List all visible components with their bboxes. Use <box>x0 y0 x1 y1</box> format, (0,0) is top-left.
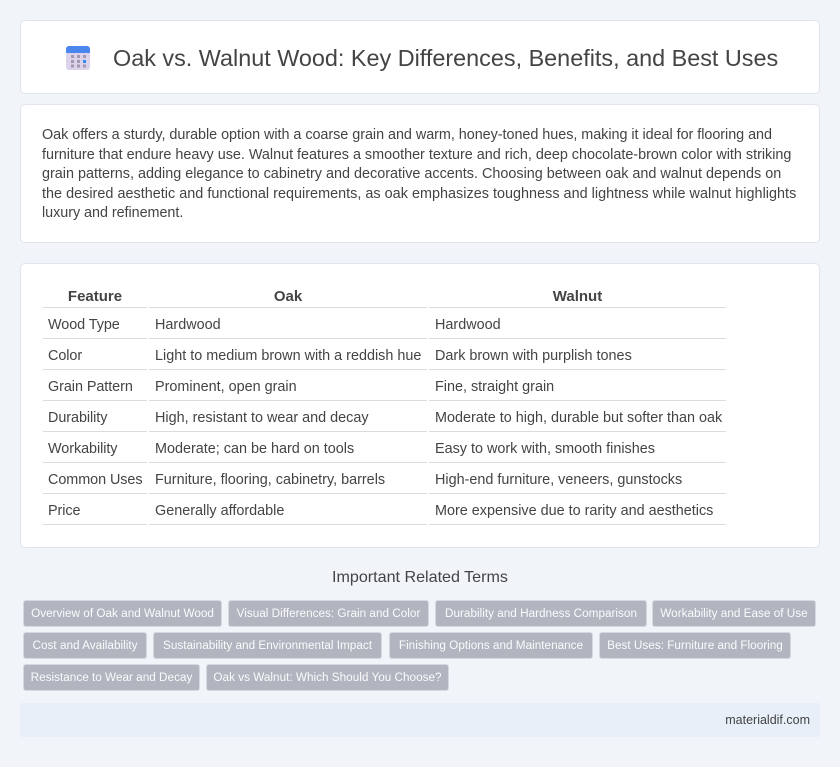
row: common uses <box>48 472 682 488</box>
tag: Resistance to Wear and Decay <box>31 671 192 684</box>
row: durability <box>48 410 722 426</box>
tag <box>23 664 200 691</box>
row: common uses: Common Uses <box>48 472 143 488</box>
row: color: Light to medium brown with a reddish hue <box>155 348 421 364</box>
row: durability: High, resistant to wear and decay <box>155 410 369 426</box>
intro paragraph <box>42 127 796 221</box>
row: price <box>48 503 713 519</box>
intro paragraph: grain patterns, adding elegance to cabinetry and decorative accents. Choosing between oak and walnut depends on <box>42 166 781 182</box>
intro paragraph: furniture that endure heavy use. Walnut features a smoother texture and rich, deep chocolate-brown color with striking <box>42 147 791 163</box>
related terms heading: Important Related Terms <box>332 568 508 586</box>
intro text panel <box>20 104 820 243</box>
row: grain pattern: Prominent, open grain <box>155 379 297 395</box>
tag: Workability and Ease of Use <box>660 607 808 620</box>
row: wood type: Wood Type <box>48 317 120 333</box>
intro paragraph: the desired aesthetic and functional requirements, as oak emphasizes toughness and lightness while walnut highlights <box>42 186 796 202</box>
row: grain pattern: Fine, straight grain <box>435 379 554 395</box>
intro paragraph: Oak offers a sturdy, durable option with a coarse grain and warm, honey-toned hues, making it ideal for flooring and <box>42 127 772 143</box>
icon: calendar <box>66 46 90 70</box>
footer source text: materialdif.com <box>725 713 810 727</box>
tag <box>599 632 791 659</box>
row: price: Generally affordable <box>155 503 284 519</box>
row: color <box>48 348 632 364</box>
title: Oak vs. Walnut Wood: Key Differences, Benefits, and Best Uses <box>113 45 778 71</box>
row: color: Dark brown with purplish tones <box>435 348 632 364</box>
row: color: Color <box>48 348 82 364</box>
tag: Finishing Options and Maintenance <box>399 639 583 652</box>
tag <box>23 600 222 627</box>
row: workability: Moderate; can be hard on tools <box>155 441 354 457</box>
tag: Oak vs Walnut: Which Should You Choose? <box>213 671 442 684</box>
title card <box>20 20 820 94</box>
table header: Oak <box>274 288 302 305</box>
tag: Best Uses: Furniture and Flooring <box>607 639 783 652</box>
tag <box>23 632 147 659</box>
tag <box>435 600 647 627</box>
table header <box>68 288 602 305</box>
row: durability: Durability <box>48 410 107 426</box>
row: workability <box>48 441 655 457</box>
row: workability: Easy to work with, smooth finishes <box>435 441 655 457</box>
tag: Visual Differences: Grain and Color <box>237 607 420 620</box>
row: grain pattern <box>48 379 554 395</box>
table header: Walnut <box>553 288 602 305</box>
row: wood type: Hardwood <box>155 317 221 333</box>
tag <box>206 664 449 691</box>
tag: Overview of Oak and Walnut Wood <box>31 607 214 620</box>
table <box>43 288 726 525</box>
row: durability: Moderate to high, durable but softer than oak <box>435 410 722 426</box>
row: common uses: High-end furniture, veneers, gunstocks <box>435 472 682 488</box>
intro paragraph: luxury and refinement. <box>42 205 183 221</box>
row: grain pattern: Grain Pattern <box>48 379 133 395</box>
row: price: More expensive due to rarity and aesthetics <box>435 503 713 519</box>
row: price: Price <box>48 503 80 519</box>
tag <box>228 600 429 627</box>
row: common uses: Furniture, flooring, cabinetry, barrels <box>155 472 385 488</box>
tag <box>153 632 382 659</box>
row: wood type <box>48 317 501 333</box>
row: wood type: Hardwood <box>435 317 501 333</box>
row: workability: Workability <box>48 441 117 457</box>
tag: Durability and Hardness Comparison <box>445 607 637 620</box>
tag <box>389 632 593 659</box>
tag: Cost and Availability <box>33 639 137 652</box>
tag: Sustainability and Environmental Impact <box>163 639 372 652</box>
table header: Feature <box>68 288 122 305</box>
footer bar <box>20 703 820 737</box>
related terms tags <box>23 600 816 691</box>
comparison table panel <box>20 263 820 548</box>
tag <box>652 600 816 627</box>
